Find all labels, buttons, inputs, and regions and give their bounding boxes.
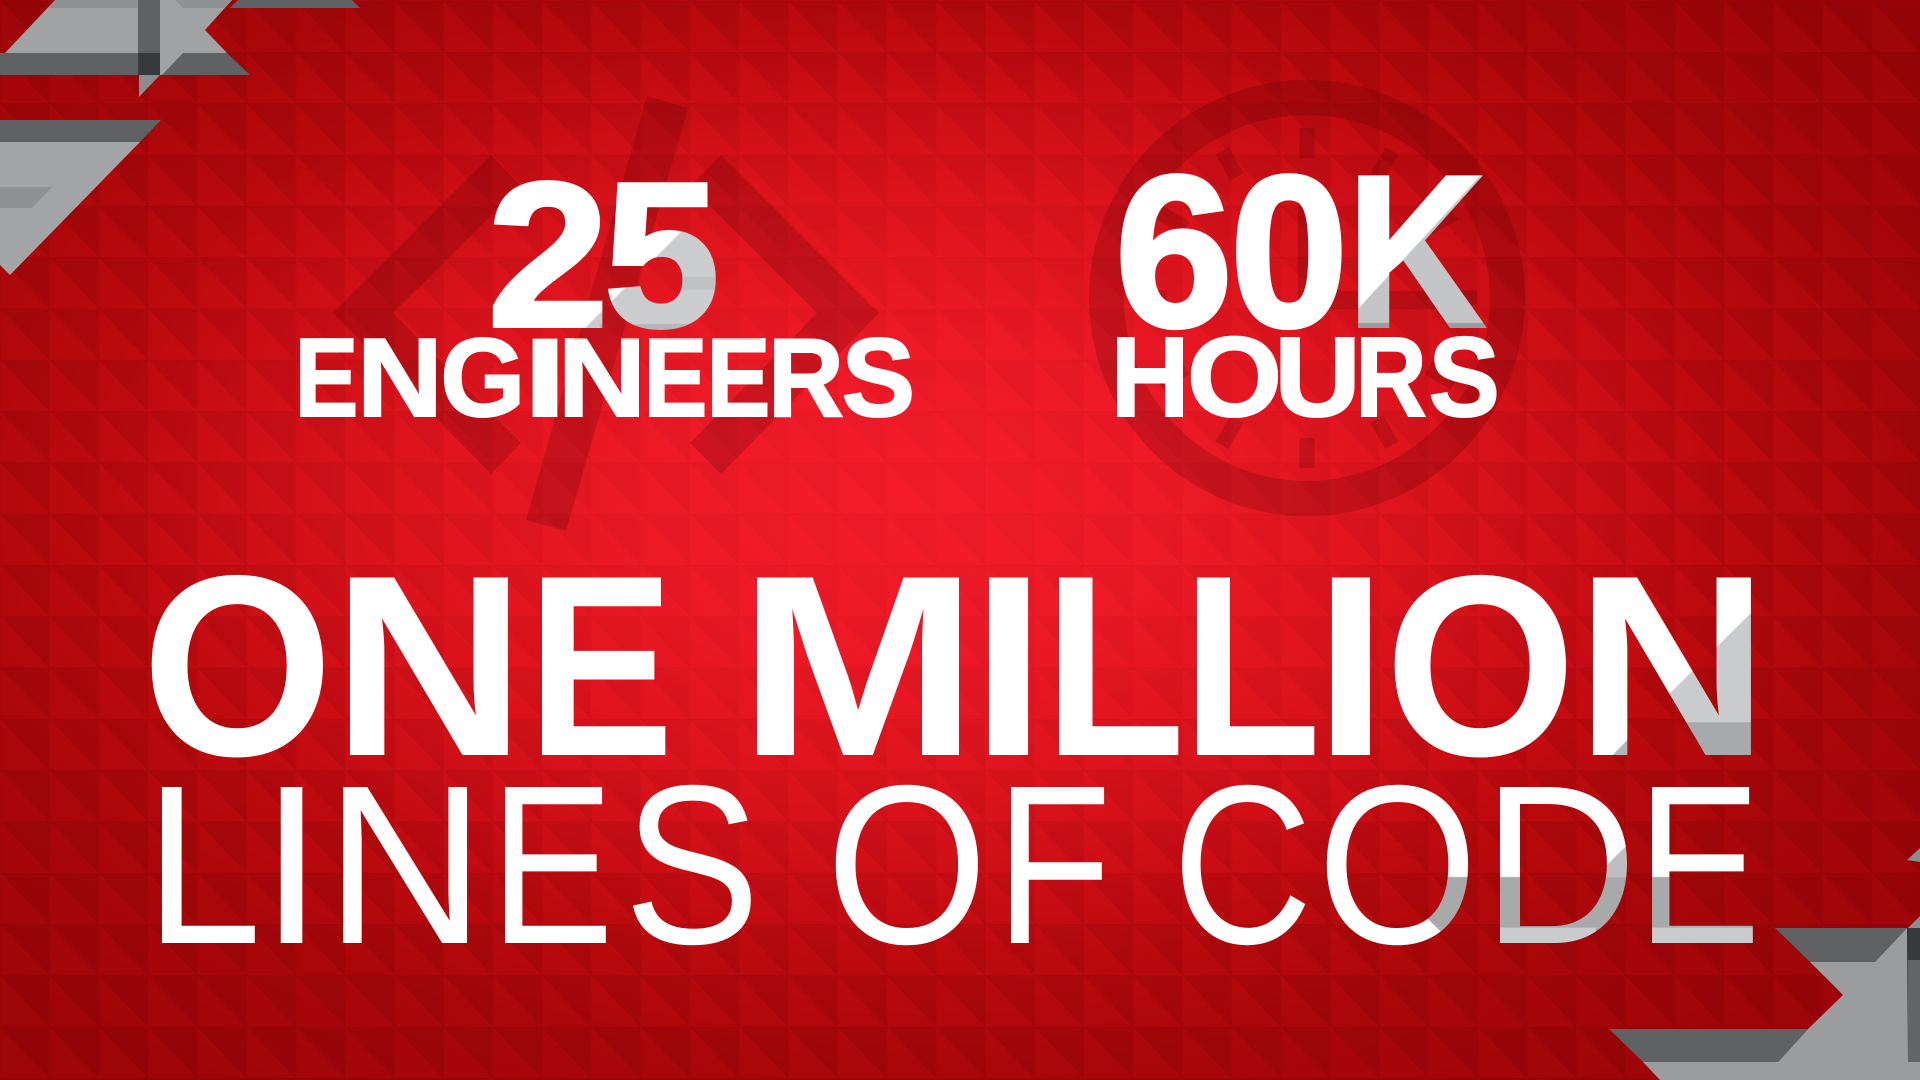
icon: code brackets [333, 96, 879, 531]
stat: 60K hours [1111, 130, 1500, 440]
number: 25: 5 [604, 140, 720, 370]
headline: one million: E [527, 521, 674, 810]
headline: lines of code: E [1637, 739, 1761, 992]
headline: lines of code: S [624, 739, 760, 992]
headline [142, 521, 1769, 992]
headline: lines of code: C [1172, 739, 1313, 992]
headline: lines of code: O [1317, 739, 1478, 992]
label: hours: O [1187, 314, 1282, 440]
label: engineers: E [295, 316, 358, 440]
label: engineers: E [644, 316, 707, 440]
number: 60K: 0 [1230, 130, 1348, 372]
corner shard: left [0, 120, 161, 275]
label: engineers: R [768, 316, 844, 440]
headline: lines of code: O [826, 739, 988, 992]
number: 60K: 6 [1115, 130, 1233, 372]
headline: lines of code: F [995, 739, 1112, 992]
corner shards: bottom right [1609, 848, 1920, 1080]
headline: lines of code: D [1482, 739, 1637, 992]
headline: one million: O [1385, 521, 1576, 810]
headline: one million: I [1314, 521, 1388, 810]
headline: one million: O [142, 521, 333, 810]
label: engineers: E [707, 316, 770, 440]
label: engineers: S [842, 316, 915, 440]
label: engineers: I [524, 316, 566, 440]
label: hours: S [1429, 314, 1500, 440]
label: hours: U [1274, 314, 1361, 440]
label: engineers: G [440, 316, 525, 440]
headline: lines of code: E [490, 739, 614, 992]
headline: one million: N [332, 521, 526, 810]
headline: one million: I [971, 521, 1046, 810]
label: hours: H [1111, 314, 1189, 440]
corner shards: top left [0, 0, 360, 97]
number: 60K: K [1347, 130, 1485, 372]
headline: one million: L [1044, 521, 1185, 810]
headline: lines of code: L [145, 739, 262, 992]
headline: lines of code: I [259, 739, 324, 992]
stat: 25 engineers [295, 140, 915, 440]
label: engineers: N [558, 316, 646, 440]
label: engineers: N [357, 316, 443, 440]
headline: one million: L [1182, 521, 1321, 810]
headline: one million: M [738, 521, 978, 810]
headline: one million: N [1575, 521, 1769, 810]
label: hours: R [1355, 314, 1427, 440]
icon: clock [1089, 80, 1525, 516]
number: 25: 2 [487, 140, 609, 370]
headline: lines of code: N [325, 739, 485, 992]
